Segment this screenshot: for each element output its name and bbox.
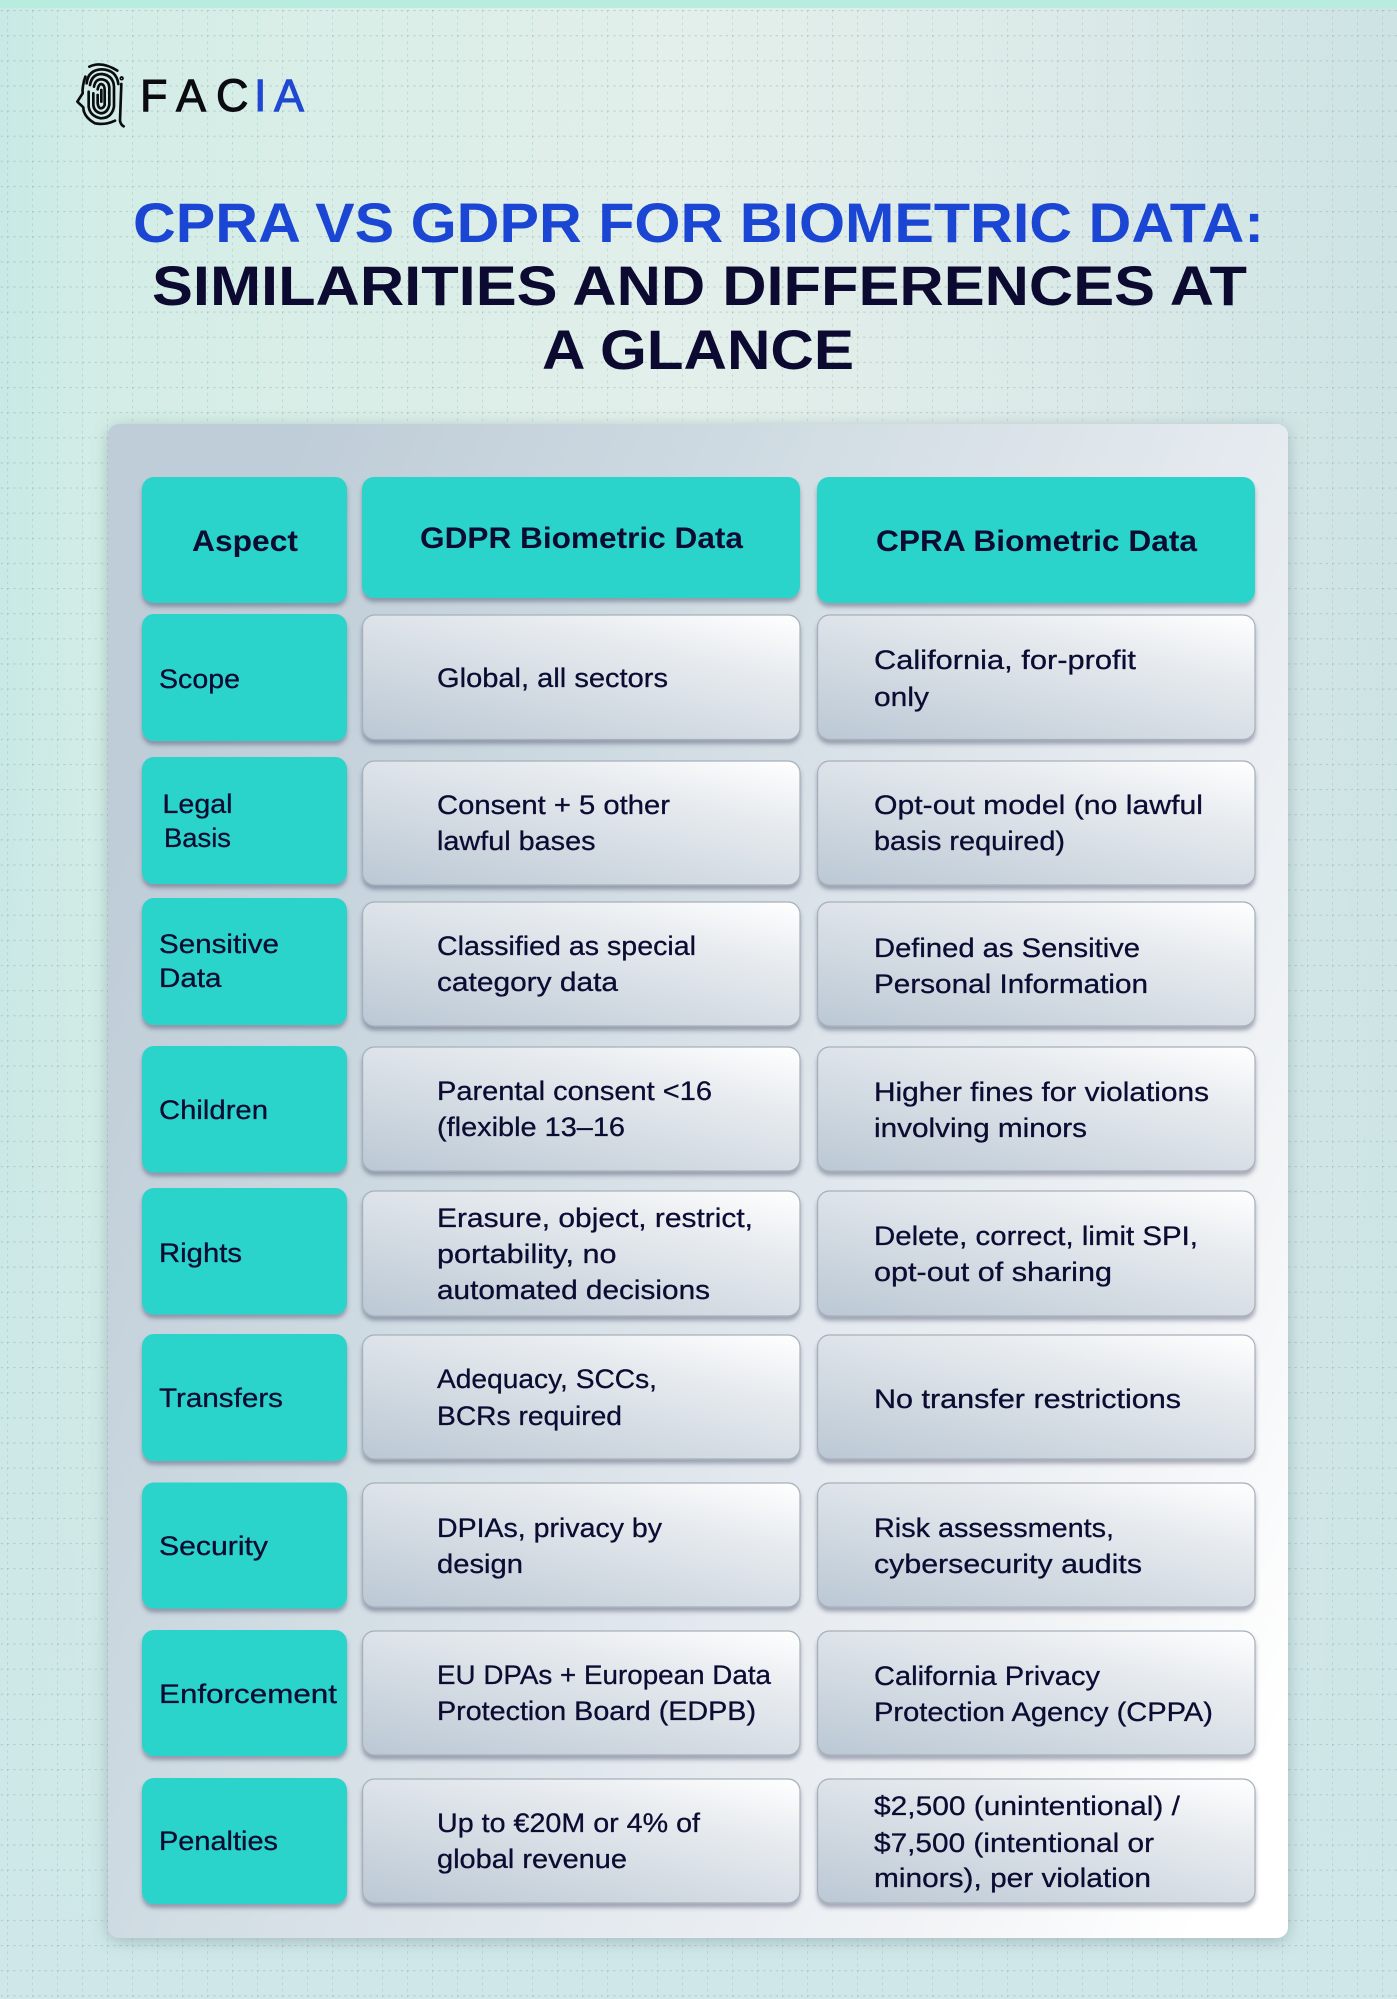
CPRA transfers bbox=[818, 1335, 1255, 1459]
CPRA rights bbox=[818, 1191, 1255, 1316]
CPRA security: Risk assessments, bbox=[874, 1513, 1114, 1543]
CPRA scope bbox=[818, 615, 1255, 740]
row label: Penalties bbox=[142, 1778, 347, 1904]
logo wordmark: IA bbox=[254, 70, 304, 121]
GDPR sensitive data bbox=[363, 902, 800, 1026]
GDPR security: DPIAs, privacy by bbox=[437, 1513, 663, 1543]
CPRA transfers: No transfer restrictions bbox=[874, 1384, 1181, 1414]
CPRA security: cybersecurity audits bbox=[874, 1549, 1142, 1579]
GDPR legal basis: Consent + 5 other bbox=[437, 790, 670, 820]
GDPR legal basis: lawful bases bbox=[437, 826, 596, 856]
header: Aspect bbox=[142, 477, 347, 603]
CPRA penalties bbox=[818, 1779, 1255, 1903]
CPRA legal basis: basis required) bbox=[874, 826, 1065, 856]
header: Aspect: Aspect bbox=[192, 525, 298, 558]
row label: Sensitive Data: Sensitive bbox=[159, 929, 279, 959]
row label: Legal Basis: Basis bbox=[164, 823, 231, 853]
row label: Rights bbox=[142, 1188, 347, 1314]
GDPR legal basis bbox=[363, 761, 800, 885]
GDPR security: design bbox=[437, 1549, 523, 1579]
logo wordmark: FAC bbox=[140, 70, 248, 121]
GDPR enforcement: Protection Board (EDPB) bbox=[437, 1696, 756, 1726]
row label: Security bbox=[142, 1482, 347, 1608]
GDPR transfers: Adequacy, SCCs, bbox=[437, 1364, 657, 1394]
row label: Legal Basis: Legal bbox=[162, 789, 232, 819]
GDPR penalties: global revenue bbox=[437, 1844, 627, 1874]
CPRA security bbox=[818, 1483, 1255, 1607]
GDPR scope bbox=[363, 615, 800, 740]
row label: Penalties: Penalties bbox=[159, 1826, 278, 1856]
CPRA penalties: $2,500 (unintentional) / bbox=[874, 1791, 1181, 1821]
row label: Scope bbox=[142, 614, 347, 741]
CPRA sensitive data bbox=[818, 902, 1255, 1026]
GDPR scope: Global, all sectors bbox=[437, 663, 668, 693]
GDPR enforcement: EU DPAs + European Data bbox=[437, 1660, 772, 1690]
CPRA penalties: minors), per violation bbox=[874, 1863, 1151, 1893]
GDPR children: Parental consent <16 bbox=[437, 1076, 712, 1106]
logo: FACIA bbox=[77, 64, 304, 126]
row label: Enforcement bbox=[142, 1630, 347, 1756]
CPRA penalties: $7,500 (intentional or bbox=[874, 1828, 1154, 1858]
GDPR sensitive data: Classified as special bbox=[437, 931, 696, 961]
logo wordmark bbox=[140, 70, 304, 121]
header: GDPR Biometric Data: GDPR Biometric Data bbox=[420, 522, 743, 555]
CPRA children: involving minors bbox=[874, 1113, 1087, 1143]
icon: fingerprint head bbox=[77, 64, 124, 126]
row label: Scope: Scope bbox=[159, 664, 240, 694]
row label: Children bbox=[142, 1046, 347, 1172]
GDPR penalties bbox=[363, 1779, 800, 1903]
header: GDPR Biometric Data bbox=[362, 477, 800, 598]
CPRA scope: only bbox=[874, 682, 930, 712]
row label: Legal Basis bbox=[142, 757, 347, 884]
GDPR transfers bbox=[363, 1335, 800, 1459]
CPRA sensitive data: Defined as Sensitive bbox=[874, 933, 1140, 963]
CPRA enforcement: California Privacy bbox=[874, 1661, 1101, 1691]
GDPR rights: Erasure, object, restrict, bbox=[437, 1203, 753, 1233]
row label: Sensitive Data: Data bbox=[159, 963, 223, 993]
title: A GLANCE bbox=[542, 318, 854, 381]
title: SIMILARITIES AND DIFFERENCES AT bbox=[152, 254, 1247, 317]
CPRA enforcement: Protection Agency (CPPA) bbox=[874, 1697, 1213, 1727]
CPRA legal basis bbox=[818, 761, 1255, 885]
GDPR security bbox=[363, 1483, 800, 1607]
GDPR rights bbox=[363, 1191, 800, 1316]
CPRA enforcement bbox=[818, 1631, 1255, 1755]
row label: Enforcement: Enforcement bbox=[159, 1679, 338, 1709]
GDPR penalties: Up to €20M or 4% of bbox=[437, 1808, 701, 1838]
header: CPRA Biometric Data: CPRA Biometric Data bbox=[876, 525, 1197, 558]
GDPR enforcement bbox=[363, 1631, 800, 1755]
CPRA rights: Delete, correct, limit SPI, bbox=[874, 1221, 1198, 1251]
GDPR sensitive data: category data bbox=[437, 967, 619, 997]
GDPR transfers: BCRs required bbox=[437, 1401, 622, 1431]
CPRA children: Higher fines for violations bbox=[874, 1077, 1209, 1107]
row label: Security: Security bbox=[159, 1531, 269, 1561]
title: CPRA VS GDPR FOR BIOMETRIC DATA: bbox=[133, 191, 1264, 254]
row label: Sensitive Data bbox=[142, 898, 347, 1025]
GDPR children: (flexible 13–16 bbox=[437, 1112, 625, 1142]
row label: Transfers: Transfers bbox=[159, 1383, 283, 1413]
CPRA rights: opt-out of sharing bbox=[874, 1257, 1112, 1287]
row label: Children: Children bbox=[159, 1095, 268, 1125]
GDPR rights: portability, no bbox=[437, 1239, 616, 1269]
GDPR children bbox=[363, 1047, 800, 1171]
panel: comparison table bbox=[108, 424, 1288, 1938]
header: CPRA Biometric Data bbox=[817, 477, 1255, 603]
CPRA sensitive data: Personal Information bbox=[874, 969, 1148, 999]
row label: Transfers bbox=[142, 1334, 347, 1461]
CPRA legal basis: Opt-out model (no lawful bbox=[874, 790, 1203, 820]
title bbox=[133, 191, 1264, 381]
GDPR rights: automated decisions bbox=[437, 1275, 710, 1305]
CPRA children bbox=[818, 1047, 1255, 1171]
CPRA scope: California, for-profit bbox=[874, 645, 1137, 675]
row label: Rights: Rights bbox=[159, 1238, 242, 1268]
